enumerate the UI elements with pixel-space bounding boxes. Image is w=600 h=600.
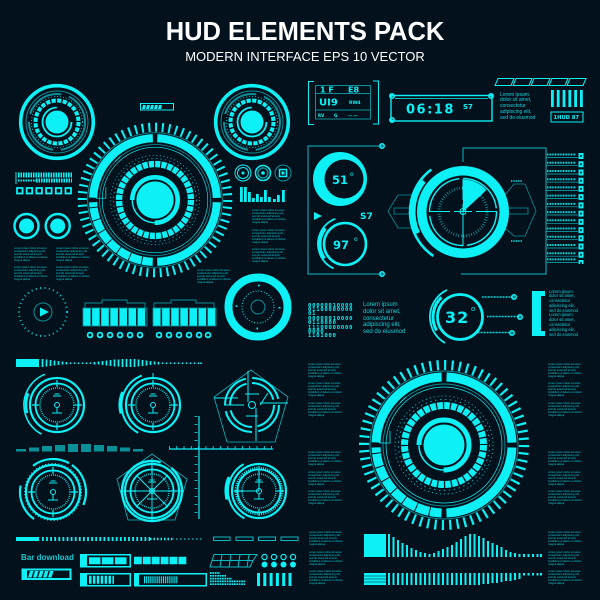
radar dial <box>389 138 537 286</box>
text block lower left column: sed do eiusmod tempor <box>308 369 336 372</box>
text block upper group: consectetur adipiscing elit, <box>56 250 88 253</box>
text block lower left column: incididunt ut labore et dolore <box>309 560 343 563</box>
text block upper group: incididunt ut labore et dolore <box>252 238 286 241</box>
data table bracket: RW4 <box>349 100 361 106</box>
text block lower left column: consectetur adipiscing elit, <box>308 366 340 369</box>
hexagon right <box>505 181 536 241</box>
text block upper group: magna aliqua <box>252 221 268 224</box>
bar download label: Bar download <box>21 553 74 562</box>
radar frame and connectors <box>461 148 546 274</box>
data table bracket: UI9 <box>319 98 338 108</box>
download progress bar <box>22 568 72 580</box>
text block lower left column: Lorem ipsum dolor sit amet, <box>309 570 342 573</box>
text block upper group: Lorem ipsum dolor sit amet, <box>252 229 285 232</box>
text block lower right column: consectetur adipiscing elit, <box>548 554 580 557</box>
widget tick meter <box>80 573 131 586</box>
text block upper group: sed do eiusmod tempor <box>252 254 280 257</box>
title: HUD ELEMENTS PACK <box>166 18 444 46</box>
gauge 51 degrees: 51 <box>332 173 348 187</box>
text block lower right column: consectetur adipiscing elit, <box>548 454 580 457</box>
gauge 97 degrees: o <box>354 236 358 243</box>
text block lower right column: Lorem ipsum dolor sit amet, <box>548 570 581 573</box>
text block lower right column: Lorem ipsum dolor sit amet, <box>548 551 581 554</box>
hud tag: 1HUD 87 <box>554 115 579 121</box>
text block lower right column: sed do eiusmod tempor <box>548 557 576 560</box>
text block lower right column: Lorem ipsum dolor sit amet, <box>548 363 581 366</box>
text block lower left column: incididunt ut labore et dolore <box>309 579 343 582</box>
play marker and S7 label: S7 <box>360 212 373 222</box>
parallelogram row <box>495 78 586 86</box>
text block lower right column: magna aliqua <box>548 502 564 505</box>
gauge 51 degrees <box>313 152 367 206</box>
outlined and filled dots <box>262 554 296 568</box>
text block lower right column: magna aliqua <box>548 375 564 378</box>
gauge 51 degrees: o <box>350 171 354 178</box>
text block lower left column: magna aliqua <box>308 502 324 505</box>
large lower hud dial <box>364 365 524 525</box>
hud tag <box>551 112 583 122</box>
text block upper group: incididunt ut labore et dolore <box>14 275 48 278</box>
text block upper group: Lorem ipsum dolor sit amet, <box>14 266 47 269</box>
text block lower right column: Lorem ipsum dolor sit amet, <box>548 471 581 474</box>
text block upper group: magna aliqua <box>252 260 268 263</box>
text block lower right column: incididunt ut labore et dolore <box>548 411 582 414</box>
scope five <box>217 449 301 533</box>
text block upper group: consectetur adipiscing elit, <box>252 212 284 215</box>
text block upper group: Lorem ipsum dolor sit amet, <box>14 247 47 250</box>
text block lower right column: consectetur adipiscing elit, <box>548 573 580 576</box>
skewed grid <box>210 554 257 567</box>
block panel right <box>153 300 216 326</box>
text block lower left column: incididunt ut labore et dolore <box>308 480 342 483</box>
text block lower left column: consectetur adipiscing elit, <box>308 405 340 408</box>
outlined capsules <box>214 537 298 540</box>
six square strip <box>134 557 187 564</box>
text block lower right column: Lorem ipsum dolor sit amet, <box>548 451 581 454</box>
text block lower left column: Lorem ipsum dolor sit amet, <box>308 471 341 474</box>
text block lower left column: Lorem ipsum dolor sit amet, <box>308 490 341 493</box>
subtitle: MODERN INTERFACE EPS 10 VECTOR <box>185 49 425 64</box>
text block lower right column: incididunt ut labore et dolore <box>548 480 582 483</box>
text block lower right column: incididunt ut labore et dolore <box>548 391 582 394</box>
text block upper group: Lorem ipsum dolor sit amet, <box>56 247 89 250</box>
binary readout: 00000010000 01100000000 01 00000010000 0110000 11100000000 0000 1101000 <box>308 302 353 339</box>
small hud ring top right <box>216 86 288 158</box>
text block lower right column: consectetur adipiscing elit, <box>548 493 580 496</box>
data table bracket: 1 F <box>320 86 334 94</box>
text block lower right column: magna aliqua <box>548 414 564 417</box>
thick ring dial <box>228 278 288 336</box>
text block upper group: incididunt ut labore et dolore <box>252 218 286 221</box>
text block lower right column: incididunt ut labore et dolore <box>548 540 582 543</box>
wide striped meter <box>134 573 207 586</box>
text block lower left column: sed do eiusmod tempor <box>308 408 336 411</box>
text block lower right column: consectetur adipiscing elit, <box>548 474 580 477</box>
text block lower right column: Lorem ipsum dolor sit amet, <box>548 382 581 385</box>
clock panel: S7 <box>463 103 473 111</box>
small hud ring top left <box>21 86 93 158</box>
three small dials <box>235 165 291 181</box>
text block lower left column: consectetur adipiscing elit, <box>308 454 340 457</box>
clock panel: 06:18 <box>406 102 455 118</box>
text block lower left column: consectetur adipiscing elit, <box>308 474 340 477</box>
text block lower left column: sed do eiusmod tempor <box>308 388 336 391</box>
data table bracket: — — <box>348 113 357 118</box>
text block lower left column: Lorem ipsum dolor sit amet, <box>308 363 341 366</box>
large central hud dial <box>82 127 228 273</box>
text block lower right column: magna aliqua <box>548 582 564 585</box>
scope three <box>7 446 99 538</box>
gauge connectors <box>478 295 522 335</box>
text block upper group: incididunt ut labore et dolore <box>252 257 286 260</box>
text block lower right column: consectetur adipiscing elit, <box>548 366 580 369</box>
text block upper group: Lorem ipsum dolor sit amet, <box>252 209 285 212</box>
text block upper group: sed do eiusmod tempor <box>56 272 84 275</box>
square indicators <box>17 188 71 194</box>
text block lower left column: magna aliqua <box>309 582 325 585</box>
text block upper group: consectetur adipiscing elit, <box>56 269 88 272</box>
text block lower right column: sed do eiusmod tempor <box>548 537 576 540</box>
signal level bars <box>16 444 143 452</box>
text block lower right column: incididunt ut labore et dolore <box>548 579 582 582</box>
text block upper group: incididunt ut labore et dolore <box>197 278 231 281</box>
text block lower left column: Lorem ipsum dolor sit amet, <box>308 402 341 405</box>
text block lower left column: incididunt ut labore et dolore <box>308 460 342 463</box>
text block lower right column: incididunt ut labore et dolore <box>548 499 582 502</box>
text block lower left column: consectetur adipiscing elit, <box>309 534 341 537</box>
text: clock note: Lorem ipsum dolor sit amet, consectetur adipiscing elit, sed do eiusmod <box>500 92 535 121</box>
block panel left <box>83 300 147 326</box>
data table bracket: RV <box>318 113 325 118</box>
text block lower right column: magna aliqua <box>548 563 564 566</box>
text block upper group: sed do eiusmod tempor <box>14 253 42 256</box>
text block lower left column: consectetur adipiscing elit, <box>309 573 341 576</box>
text block upper group: magna aliqua <box>252 241 268 244</box>
text block upper group: incididunt ut labore et dolore <box>56 275 90 278</box>
text block lower right column: consectetur adipiscing elit, <box>548 534 580 537</box>
text: bracket note: Lorem ipsum dolor sit amet, consectetur adipiscing elit, sed do eiusmod Lorem ipsum dolor sit amet, consectetur adipiscing elit, sed do eiusmod <box>549 288 578 337</box>
data table bracket <box>308 81 378 124</box>
text block lower left column: magna aliqua <box>308 483 324 486</box>
text block lower left column: sed do eiusmod tempor <box>308 496 336 499</box>
twin ring icons <box>14 214 70 238</box>
text block lower left column: Lorem ipsum dolor sit amet, <box>308 382 341 385</box>
text block lower left column: incididunt ut labore et dolore <box>308 391 342 394</box>
rounded bars <box>257 573 294 586</box>
text block upper group: magna aliqua <box>14 259 30 262</box>
lower dash bar <box>16 537 202 541</box>
wave chart <box>364 534 541 557</box>
clock panel <box>390 94 493 122</box>
scope two <box>110 362 196 448</box>
text block lower left column: incididunt ut labore et dolore <box>308 411 342 414</box>
hexagon left <box>388 195 412 228</box>
text block lower right column: magna aliqua <box>548 543 564 546</box>
data table bracket: G <box>334 113 337 118</box>
readout list <box>546 153 581 264</box>
text block lower left column: sed do eiusmod tempor <box>308 477 336 480</box>
text block upper group: magna aliqua <box>197 281 213 284</box>
widget triple cell <box>80 554 131 568</box>
gear row <box>88 333 210 337</box>
play dial <box>19 288 67 336</box>
text block lower right column: sed do eiusmod tempor <box>548 369 576 372</box>
tick meter <box>16 172 72 184</box>
text block lower left column: incididunt ut labore et dolore <box>309 540 343 543</box>
text block lower left column: incididunt ut labore et dolore <box>308 499 342 502</box>
text block upper group: magna aliqua <box>56 278 72 281</box>
text block upper group: sed do eiusmod tempor <box>56 253 84 256</box>
pentagon scope two <box>117 454 187 522</box>
text block upper group: sed do eiusmod tempor <box>252 215 280 218</box>
text block lower left column: Lorem ipsum dolor sit amet, <box>309 531 342 534</box>
text block upper group: consectetur adipiscing elit, <box>14 269 46 272</box>
text block lower right column <box>548 363 582 585</box>
text block lower right column: magna aliqua <box>548 394 564 397</box>
gauge 32 degrees: o <box>471 305 475 313</box>
text block lower left column: magna aliqua <box>309 543 325 546</box>
text block lower left column: sed do eiusmod tempor <box>309 576 337 579</box>
top wave bars <box>16 359 201 367</box>
text block lower left column: sed do eiusmod tempor <box>309 557 337 560</box>
text block lower right column: magna aliqua <box>548 463 564 466</box>
text block upper group: sed do eiusmod tempor <box>14 272 42 275</box>
gauge 97 degrees: 97 <box>333 238 349 252</box>
text block lower right column: incididunt ut labore et dolore <box>548 372 582 375</box>
text block lower left column: consectetur adipiscing elit, <box>309 554 341 557</box>
mini bar chart <box>240 187 285 202</box>
text block lower left column: incididunt ut labore et dolore <box>308 372 342 375</box>
text block lower left column: consectetur adipiscing elit, <box>308 385 340 388</box>
text block upper group: incididunt ut labore et dolore <box>56 256 90 259</box>
text block lower right column: sed do eiusmod tempor <box>548 457 576 460</box>
text block lower left column: magna aliqua <box>308 463 324 466</box>
text block upper group: incididunt ut labore et dolore <box>14 256 48 259</box>
text block upper group <box>14 209 286 284</box>
text block lower right column: magna aliqua <box>548 483 564 486</box>
text block lower right column: Lorem ipsum dolor sit amet, <box>548 402 581 405</box>
text block lower right column: Lorem ipsum dolor sit amet, <box>548 531 581 534</box>
text block lower left column: magna aliqua <box>309 563 325 566</box>
text block lower right column: incididunt ut labore et dolore <box>548 560 582 563</box>
text block lower left column: magna aliqua <box>308 414 324 417</box>
left gauge frame <box>308 144 384 276</box>
bracket bar <box>532 291 545 336</box>
text block lower right column: sed do eiusmod tempor <box>548 477 576 480</box>
text block upper group: consectetur adipiscing elit, <box>197 272 229 275</box>
cross axes ruler <box>169 416 273 519</box>
text block lower right column: consectetur adipiscing elit, <box>548 385 580 388</box>
stair grid <box>210 573 245 584</box>
text block lower right column: incididunt ut labore et dolore <box>548 460 582 463</box>
data table bracket: E8 <box>348 86 359 94</box>
progress indicator top <box>140 104 174 110</box>
gauge 32 degrees <box>419 276 501 358</box>
text block lower left column: magna aliqua <box>308 375 324 378</box>
striped equaliser <box>364 573 541 585</box>
text block upper group: magna aliqua <box>56 259 72 262</box>
text block upper group: Lorem ipsum dolor sit amet, <box>197 269 230 272</box>
text block lower left column: sed do eiusmod tempor <box>308 457 336 460</box>
gauge 32 degrees: 32 <box>445 308 469 327</box>
text block upper group: sed do eiusmod tempor <box>197 275 225 278</box>
text block lower left column: sed do eiusmod tempor <box>309 537 337 540</box>
text block lower left column: consectetur adipiscing elit, <box>308 493 340 496</box>
text: binary note: Lorem ipsum dolor sit amet, consectetur adipiscing elit, sed do eiusmod <box>363 302 405 335</box>
play marker and S7 label <box>314 212 373 222</box>
text block lower right column: sed do eiusmod tempor <box>548 388 576 391</box>
text block upper group: Lorem ipsum dolor sit amet, <box>252 248 285 251</box>
text block lower right column: sed do eiusmod tempor <box>548 576 576 579</box>
text block lower right column: sed do eiusmod tempor <box>548 496 576 499</box>
text block lower left column: Lorem ipsum dolor sit amet, <box>308 451 341 454</box>
text block upper group: sed do eiusmod tempor <box>252 235 280 238</box>
pentagon scope one <box>214 370 288 442</box>
scope one <box>12 360 102 450</box>
text block lower right column: sed do eiusmod tempor <box>548 408 576 411</box>
text block upper group: consectetur adipiscing elit, <box>252 251 284 254</box>
text block lower left column: magna aliqua <box>308 394 324 397</box>
text block upper group: magna aliqua <box>14 278 30 281</box>
text block upper group: consectetur adipiscing elit, <box>14 250 46 253</box>
text block upper group: consectetur adipiscing elit, <box>252 232 284 235</box>
text block upper group: Lorem ipsum dolor sit amet, <box>56 266 89 269</box>
vertical bars <box>551 90 584 107</box>
text block lower left column: Lorem ipsum dolor sit amet, <box>309 551 342 554</box>
gauge 97 degrees <box>309 208 381 280</box>
text block lower left column <box>308 363 343 585</box>
text block lower right column: Lorem ipsum dolor sit amet, <box>548 490 581 493</box>
text block lower right column: consectetur adipiscing elit, <box>548 405 580 408</box>
